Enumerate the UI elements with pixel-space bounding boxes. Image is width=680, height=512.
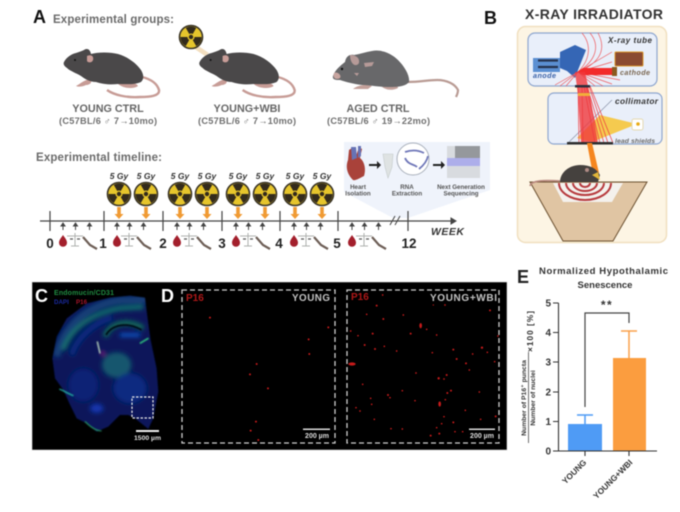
platform box (528, 180, 648, 242)
timeline axis (40, 211, 456, 231)
mouse on platform (530, 165, 600, 186)
panel letter C: C (35, 286, 48, 306)
error bars (577, 415, 593, 424)
label: young: YOUNG (292, 293, 330, 304)
label: next generation sequencing: Sequencing (443, 190, 479, 198)
heading: experimental timeline: Experimental timeline: (36, 152, 162, 164)
x tick labels: YOUNG (560, 457, 588, 486)
label: P16: P16 (351, 292, 369, 303)
rays from target (555, 33, 620, 86)
week numbers (46, 236, 417, 251)
label: young plus WBI: YOUNG+WBI (214, 103, 280, 115)
scale bar (134, 430, 161, 442)
red beam fan (575, 72, 613, 143)
radiation doses: 5 Gy (286, 171, 305, 181)
bar: young plus WBI (613, 358, 646, 450)
y tick labels: 2 (545, 388, 551, 398)
icon: sequencer (447, 146, 480, 178)
chart title: Normalized Hypothalamic (539, 266, 668, 277)
chart title: Senescence (578, 280, 632, 291)
icon: RNA magnified circle (397, 143, 429, 175)
label: RNA extraction: RNA (400, 184, 414, 191)
label: cathode: cathode (620, 68, 650, 77)
icon: sample tube (383, 154, 393, 178)
scale bar (303, 428, 330, 440)
micrograph: young (182, 290, 335, 443)
panel B: irradiator diagram (518, 26, 666, 242)
radiation doses: 5 Gy (313, 171, 332, 181)
label: aged control: AGED CTRL (347, 103, 410, 115)
panel D: P16 micrographs (161, 286, 499, 443)
label: RNA extraction: Extraction (392, 190, 422, 198)
label: heart isolation (345, 184, 371, 198)
y axis label: Number of nuclei (530, 370, 537, 426)
radiation doses: 5 Gy (229, 171, 248, 181)
label: young control: YOUNG CTRL (72, 103, 144, 115)
radiation doses: 5 Gy (110, 171, 129, 181)
week numbers: 3 (218, 236, 226, 251)
panel E: bar chart (517, 266, 668, 501)
electron beam (577, 68, 615, 75)
scale bar: 200 µm (305, 433, 329, 440)
mouse: aged control (333, 51, 458, 97)
y axis label (521, 311, 537, 443)
radiation doses: 5 Gy (137, 171, 156, 181)
y tick labels: 1 (545, 417, 551, 428)
light source (632, 119, 643, 130)
panel letter E: E (517, 267, 529, 287)
label: next generation sequencing: Next Generation (437, 184, 485, 191)
collimator mirror line (569, 100, 612, 142)
panel background (518, 26, 666, 242)
callout: RNA sequencing workflow (344, 142, 490, 218)
y tick labels: 5 (545, 298, 551, 310)
y tick labels: 3 (545, 358, 551, 368)
collimator box (548, 72, 662, 145)
arrow (369, 161, 381, 169)
label: collimator: collimator (615, 96, 659, 106)
significance bracket: ** (601, 298, 613, 312)
label: aged control (327, 103, 430, 126)
label: heart isolation: Isolation (345, 190, 371, 198)
label: X-ray tube: X-ray tube (607, 36, 653, 45)
yellow light (577, 115, 637, 142)
y tick labels: 4 (545, 328, 551, 339)
puncta (348, 294, 499, 437)
puncta (209, 317, 329, 441)
radiation doses: 5 Gy (256, 171, 275, 181)
label: next generation sequencing (437, 184, 485, 198)
panel C: brain section (35, 286, 161, 442)
axes (553, 303, 657, 456)
label: lead shields: lead shields (615, 138, 655, 145)
label: young control (59, 103, 157, 126)
mouse: young plus WBI (199, 49, 295, 97)
legend: stains (54, 290, 114, 306)
label: heart isolation: Heart (350, 184, 366, 191)
icon: radiation source with beam (179, 26, 209, 56)
x tick labels: YOUNG+WBI (591, 457, 634, 501)
y axis label: ×100 [%] (525, 311, 535, 352)
axis label: week: WEEK (431, 226, 465, 238)
cathode (612, 52, 643, 76)
week numbers: 0 (46, 236, 54, 251)
micrograph: young plus WBI (347, 290, 499, 443)
panel letter A: A (33, 7, 46, 27)
label: RNA extraction (392, 184, 422, 198)
y tick labels: 0 (545, 446, 551, 458)
label: P16: P16 (186, 293, 204, 304)
label: aged control: (C57BL/6 ♂ 19→22mo) (327, 116, 430, 126)
microscopy strip (32, 282, 507, 450)
panel letter D: D (161, 286, 174, 306)
panel A: experimental timeline (36, 142, 490, 251)
panel A: experimental groups (33, 7, 458, 126)
y axis label: Number of P16⁺ puncta (521, 360, 528, 436)
scale bar (469, 428, 495, 440)
anode (533, 45, 586, 78)
label: young plus WBI: (C57BL/6 ♂ 7→10mo) (198, 116, 296, 126)
radiation doses: 5 Gy (198, 171, 217, 181)
X-ray tube box (528, 33, 657, 86)
chart title (539, 266, 668, 291)
legend: stains: P16 (76, 299, 88, 306)
mouse: young control (64, 49, 159, 97)
scale bar: 1500 µm (134, 435, 161, 442)
icon: heart (347, 146, 365, 180)
week numbers: 12 (401, 236, 417, 251)
panel letter B: B (484, 8, 497, 28)
weekly sampling icons (59, 223, 386, 249)
label: young plus WBI: YOUNG+WBI (430, 293, 497, 304)
label: young control: (C57BL/6 ♂ 7→10mo) (59, 116, 157, 126)
week numbers: 2 (159, 236, 167, 251)
shutter bars (567, 85, 613, 144)
brain image (52, 296, 158, 432)
significance bracket (585, 298, 629, 407)
week numbers: 4 (275, 236, 283, 251)
y tick labels (545, 298, 551, 458)
orange beam to mouse (587, 143, 599, 175)
radiation doses: 5 Gy (171, 171, 190, 181)
label: young plus WBI (198, 103, 296, 126)
scale bar: 200 µm (470, 433, 494, 440)
x tick labels (560, 457, 634, 501)
callout background (344, 142, 490, 218)
inset box (132, 397, 153, 418)
bar: young (568, 424, 602, 450)
heading: experimental groups: Experimental groups: (53, 14, 174, 26)
legend: stains: Endomucin/CD31 (54, 290, 114, 297)
label: anode: anode (533, 71, 556, 80)
week numbers: 5 (333, 236, 341, 251)
arrow (433, 161, 445, 169)
radiation doses (107, 171, 334, 219)
title: X-ray irradiator: X-RAY IRRADIATOR (525, 6, 663, 22)
legend: stains: DAPI (54, 299, 69, 306)
week numbers: 1 (99, 236, 107, 251)
